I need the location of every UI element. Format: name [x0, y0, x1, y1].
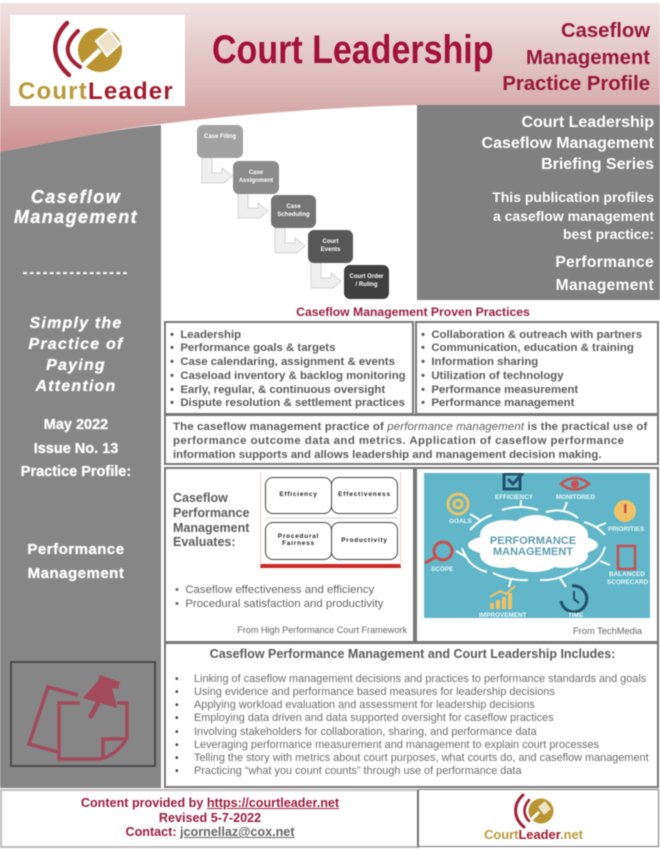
subtitle: practice profile [502, 20, 651, 95]
icon: monitored eye [561, 478, 589, 490]
flow step: court events: Events [321, 247, 340, 253]
panel: performance management description: performance outcome data and metrics. Application of caseflow performance [173, 435, 624, 447]
source caption: From TechMedia [573, 626, 642, 636]
source caption: From High Performance Court Framework [237, 625, 407, 635]
subtitle: practice profile: Management [526, 46, 650, 68]
includes list: Practicing “what you count counts” through use of performance data [194, 765, 522, 777]
flow step: court events: Court [322, 239, 338, 245]
bullet dots: • [175, 727, 179, 738]
subtitle: practice profile: Practice Profile [502, 73, 650, 95]
sidebar text: topic [27, 541, 125, 582]
evaluates heading: Performance [173, 506, 249, 520]
illustration labels: PRIORITIES [608, 526, 645, 533]
sidebar text: topic: Management [28, 564, 124, 582]
right panel: briefing series: Briefing Series [541, 156, 654, 173]
quadrant: procedural fairness [277, 532, 319, 547]
quadrant diagram [260, 472, 401, 568]
evaluates heading: Caseflow [173, 491, 228, 505]
icon: efficiency check [504, 473, 523, 489]
illustration labels: GOALS [449, 518, 472, 525]
icon: goals target [448, 494, 468, 514]
icon: scorecard clipboard [618, 546, 635, 569]
footer: courtleader.net logo [418, 789, 659, 847]
evaluates heading: Evaluates: [173, 535, 236, 549]
flow step: case scheduling: Scheduling [277, 212, 310, 218]
includes list: Telling the story with metrics about court purposes, what courts do, and caseflow management [194, 752, 649, 764]
illustration labels: SCORECARD [607, 579, 649, 586]
footer: content credits: Contact: jcornellaz@cox.net [125, 825, 295, 839]
evaluates bullets [174, 584, 384, 610]
icon: sound arcs [55, 23, 80, 75]
illustration labels: SCOPE [431, 566, 454, 573]
icon: priorities head [614, 500, 636, 522]
bullet dots [174, 674, 179, 777]
illustration labels: BALANCED [609, 571, 645, 578]
logo: CourtLeader [10, 15, 185, 106]
cloud title [490, 535, 576, 558]
cloud title: MANAGEMENT [493, 546, 573, 558]
sidebar text: slogan: Simply the [30, 315, 122, 332]
includes list [194, 673, 649, 778]
process flow diagram [196, 124, 390, 300]
bullet dots: • [175, 687, 179, 698]
right panel: publication description: This publication profiles [492, 189, 654, 205]
includes list: Involving stakeholders for collaboration, sharing, and performance data [194, 726, 537, 738]
panel: practices right: • Collaboration & outreach with partners • Communication, education & training • Information sharing • Utilization of technology • Performance measurement • Performance management [421, 328, 642, 409]
icon: time clock [561, 586, 587, 612]
cloud ripple lines [456, 500, 610, 587]
flow step: case scheduling: Case [286, 204, 301, 210]
sidebar text: slogan: Practice of [28, 336, 124, 353]
performance management illustration [424, 473, 650, 618]
includes list: Leveraging performance measurement and management to explain court processes [194, 739, 599, 751]
flow step: court order ruling: Court Order [349, 274, 384, 280]
bullet dots: • [175, 766, 179, 777]
right panel: performance management: Management [556, 276, 654, 294]
panel: practices left: • Leadership • Performance goals & targets • Case calendaring, assignment & events • Caseload inventory & backlog monitoring • Early, regular, & continuous oversight • Dispute resolution & settlement practices [170, 328, 406, 409]
quadrant: procedural fairness: Fairness [282, 540, 315, 547]
logo: CourtLeader: CourtLeader [18, 78, 174, 105]
flow step: case assignment: Assignment [239, 178, 273, 184]
sidebar text: caseflow management: Management [14, 207, 138, 227]
sidebar text: issue information: Practice Profile: [21, 464, 131, 480]
sidebar text: slogan [28, 315, 124, 395]
title: Court Leadership [212, 28, 493, 72]
quadrant: efficiency: Efficiency [279, 491, 318, 498]
right panel: briefing series [482, 114, 654, 174]
footer: content credits: Content provided by https://courtleader.net [81, 796, 339, 810]
quadrant: procedural fairness: Procedural [278, 533, 319, 540]
includes list: Employing data driven and data supported oversight for caseflow practices [194, 712, 554, 724]
panel: evaluates [164, 467, 415, 643]
evaluates heading: Management [173, 521, 249, 535]
flow step: court events [320, 238, 341, 253]
bullet dots: • [175, 700, 179, 711]
footer: content credits: Revised 5-7-2022 [159, 811, 261, 825]
right panel: performance management: Performance [555, 254, 654, 271]
flow step: case scheduling [277, 202, 310, 218]
sidebar text: issue information: Issue No. 13 [34, 440, 118, 456]
flow step: court order ruling: / Ruling [356, 282, 378, 288]
panel: performance management description: The caseflow management practice of performance management is the practical use of [173, 421, 647, 433]
right panel: publication description [492, 189, 654, 243]
flow step: case assignment: Case [249, 170, 263, 176]
bullet dots: • [175, 740, 179, 751]
bullet dots: • [175, 713, 179, 724]
illustration labels: MONITORED [556, 494, 595, 501]
flow step: case filing: Case Filing [204, 134, 236, 140]
sidebar text: issue information: May 2022 [44, 417, 108, 433]
heading: proven practices: Caseflow Management Proven Practices [296, 305, 530, 319]
panel: court leadership includes [164, 642, 659, 788]
quadrant: effectiveness: Effectiveness [338, 491, 391, 498]
right panel: publication description: best practice: [563, 226, 654, 242]
illustration labels: EFFICIENCY [495, 494, 534, 501]
bullet dots: • [175, 674, 179, 685]
evaluates heading [172, 491, 250, 549]
right panel: publication description: a caseflow management [493, 208, 654, 224]
sidebar text: caseflow management [14, 187, 138, 228]
sidebar text: topic: Performance [27, 541, 125, 558]
flow step: court order ruling [349, 272, 384, 288]
panel: performance management description [164, 414, 659, 465]
footer: courtleader.net logo: CourtLeader.net [484, 827, 583, 842]
cloud title: PERFORMANCE [490, 535, 576, 547]
bullet dots: • [175, 753, 179, 764]
icon: sticky notes with push pin [10, 661, 156, 767]
panel: techmedia image [415, 467, 659, 643]
flow step: case assignment [238, 169, 274, 184]
icon: gavel medallion [78, 28, 122, 72]
icon: scope magnifier [425, 542, 452, 563]
sidebar text: slogan: Paying [46, 357, 106, 374]
footer: content credits [0, 789, 419, 848]
sidebar text: slogan: Attention [35, 378, 116, 395]
right panel: briefing series: Court Leadership [522, 114, 654, 131]
panel: performance management description: information supports and allows leadership and management decision making. [173, 449, 602, 461]
sidebar text: issue information [20, 417, 131, 480]
evaluates bullets: • Procedural satisfaction and productivity [175, 598, 384, 610]
right panel: performance management [555, 254, 654, 294]
includes list: Using evidence and performance based measures for leadership decisions [194, 686, 555, 698]
icon: improvement chart [490, 586, 515, 609]
illustration labels [431, 494, 649, 619]
right panel: briefing series: Caseflow Management [482, 135, 654, 152]
sidebar dashes: ---------------- [23, 264, 129, 280]
includes list: Applying workload evaluation and assessment for leadership decisions [194, 699, 535, 711]
sidebar text: caseflow management: Caseflow [31, 187, 121, 207]
includes heading: Caseflow Performance Management and Court Leadership Includes: [210, 647, 615, 661]
cloud [468, 515, 598, 572]
quadrant: productivity: Productivity [341, 537, 388, 544]
subtitle: practice profile: Caseflow [561, 20, 650, 42]
includes list: Linking of caseflow management decisions and practices to performance standards and goals [194, 673, 646, 685]
evaluates bullets: • Caseflow effectiveness and efficiency [175, 584, 374, 596]
